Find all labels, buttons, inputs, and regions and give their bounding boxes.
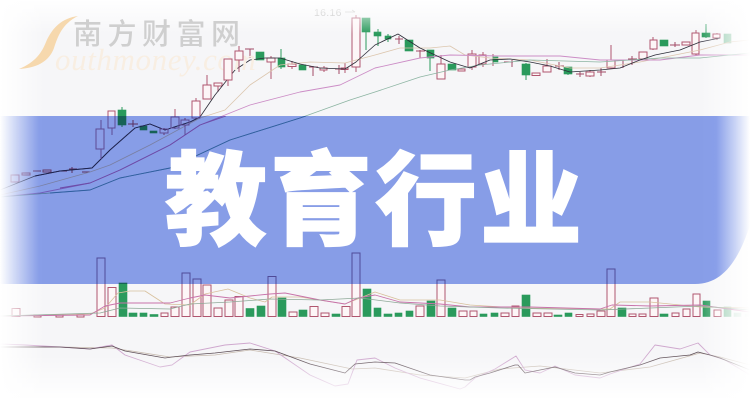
candles redrawn above the logo	[224, 46, 243, 86]
MA10 line	[0, 40, 750, 195]
MACD indicator lines	[0, 343, 750, 389]
logo swoosh S	[19, 16, 78, 69]
band bar outlines	[97, 253, 615, 284]
falling candles	[118, 18, 731, 133]
MACD signal line	[0, 347, 750, 378]
watermark logo: Southmoney	[19, 16, 257, 77]
rising candles	[11, 15, 720, 182]
logo Chinese name: 南方财富网	[73, 18, 246, 51]
band teal average	[50, 116, 306, 193]
price peak label: 16.16	[314, 7, 342, 19]
doji crosses	[33, 36, 680, 173]
MACD oscillator line	[0, 343, 750, 389]
logo latin name: outhmoney.com	[55, 42, 257, 77]
rising volume bars	[12, 253, 721, 317]
volume average lines	[0, 289, 750, 316]
falling volume bars	[119, 283, 750, 316]
moving average lines	[0, 34, 750, 197]
MA5 line	[0, 34, 720, 190]
band MA5 line	[35, 117, 200, 176]
blue title band	[0, 116, 750, 284]
MA20 line	[0, 55, 750, 197]
chart strokes seen through the band	[35, 116, 615, 284]
MA30 line	[0, 53, 750, 197]
title: 教育行业	[165, 145, 585, 259]
band candle outlines	[96, 116, 200, 159]
candlestick price chart	[11, 15, 731, 182]
price peak label	[314, 7, 355, 19]
band moving averages	[60, 116, 226, 188]
volume bars	[0, 253, 750, 317]
MACD main line	[0, 346, 750, 380]
